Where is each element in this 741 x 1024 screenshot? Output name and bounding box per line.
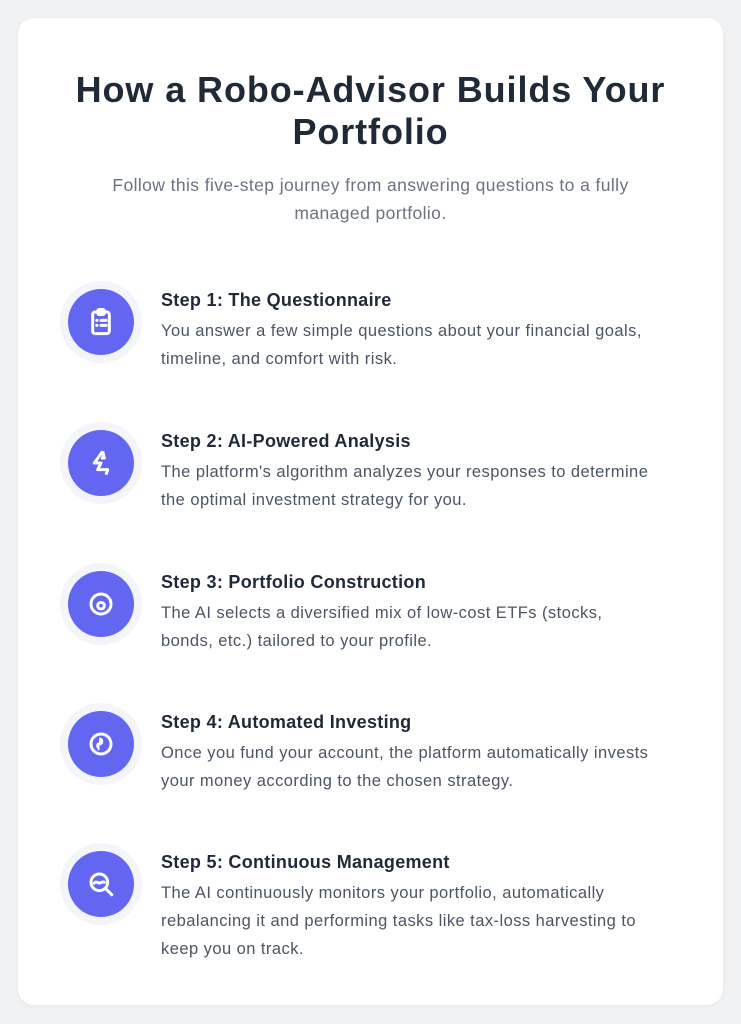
step 5 bbox=[60, 843, 636, 958]
text: The AI selects a diversified mix of low-cost ETFs (stocks, bbox=[161, 604, 602, 622]
text: timeline, and comfort with risk. bbox=[161, 350, 397, 368]
icon: coin bbox=[60, 703, 142, 785]
text: bonds, etc.) tailored to your profile. bbox=[161, 632, 432, 650]
subtitle: Follow this five-step journey from answering questions to a fully bbox=[112, 175, 629, 195]
text: keep you on track. bbox=[161, 940, 304, 958]
text bbox=[161, 463, 648, 509]
text bbox=[161, 884, 636, 958]
subtitle bbox=[112, 175, 629, 223]
step 2 bbox=[60, 422, 648, 509]
text bbox=[161, 744, 648, 790]
heading: Step 1: The Questionnaire bbox=[161, 290, 392, 310]
step 1 bbox=[60, 281, 642, 368]
icon: clipboard bbox=[60, 281, 142, 363]
text: The AI continuously monitors your portfolio, automatically bbox=[161, 884, 604, 902]
text: You answer a few simple questions about your financial goals, bbox=[161, 322, 642, 340]
step 4 bbox=[60, 703, 648, 790]
title bbox=[76, 69, 665, 152]
text bbox=[161, 604, 602, 650]
heading: Step 5: Continuous Management bbox=[161, 852, 450, 872]
step 3 bbox=[60, 563, 602, 650]
text: your money according to the chosen strategy. bbox=[161, 772, 513, 790]
icon: magnifier bbox=[60, 843, 142, 925]
subtitle: managed portfolio. bbox=[294, 203, 447, 223]
text bbox=[161, 322, 642, 368]
text: rebalancing it and performing tasks like tax-loss harvesting to bbox=[161, 912, 636, 930]
text: The platform's algorithm analyzes your responses to determine bbox=[161, 463, 648, 481]
heading: Step 2: AI-Powered Analysis bbox=[161, 431, 411, 451]
icon: target bbox=[60, 563, 142, 645]
text: the optimal investment strategy for you. bbox=[161, 491, 467, 509]
title: Portfolio bbox=[292, 111, 449, 152]
heading: Step 3: Portfolio Construction bbox=[161, 572, 426, 592]
icon: bolt bbox=[60, 422, 142, 504]
title: How a Robo-Advisor Builds Your bbox=[76, 69, 665, 110]
text: Once you fund your account, the platform automatically invests bbox=[161, 744, 648, 762]
heading: Step 4: Automated Investing bbox=[161, 712, 411, 732]
